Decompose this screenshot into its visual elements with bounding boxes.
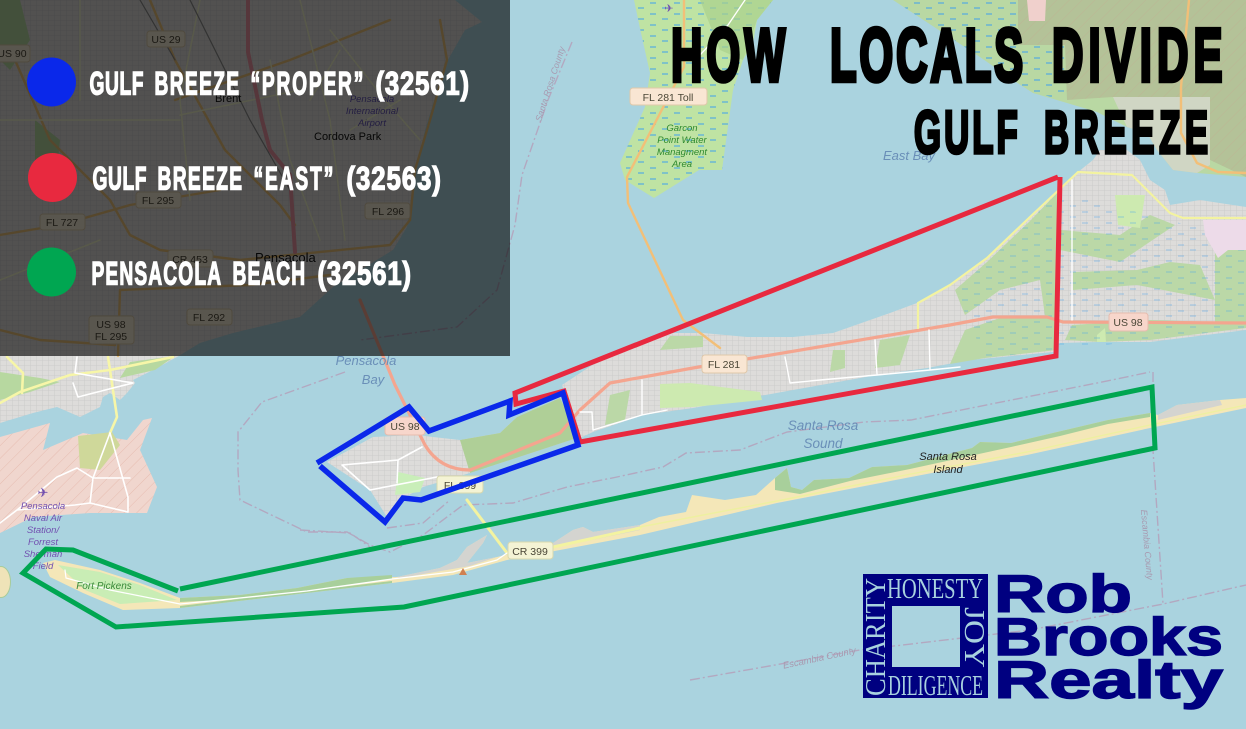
- legend item: proper: “PROPER”: [250, 65, 363, 102]
- legend item: proper: BREEZE: [154, 65, 239, 102]
- label: Pensacola Naval Air Station: Pensacola: [21, 501, 65, 512]
- label: Pensacola Bay: Bay: [362, 372, 386, 387]
- label: Santa Rosa Sound: Sound: [803, 436, 843, 451]
- shield: FL 281: [702, 355, 747, 373]
- label: Pensacola Naval Air Station: Naval Air: [24, 513, 63, 524]
- labels under dark panel: [0, 31, 410, 344]
- white local roads: [580, 180, 1072, 430]
- logo: Rob Brooks Realty: [860, 565, 1224, 710]
- shield: US 98 west: [385, 417, 425, 435]
- city names under panel: Pensacola: [255, 250, 316, 265]
- label: Santa Rosa Island: Island: [933, 464, 964, 476]
- land: north shore and Pensacola: [0, 0, 482, 423]
- wetland dashes east: [955, 192, 1246, 358]
- interstate: [248, 0, 295, 252]
- golf course green: [460, 398, 580, 473]
- label: Santa Rosa Island: Santa Rosa: [919, 451, 977, 463]
- northeast highway: [1181, 0, 1246, 173]
- region outline: Gulf Breeze East (red): [515, 177, 1060, 442]
- lilac site: [1203, 220, 1246, 258]
- label: Escambia County vertical: Escambia County: [1139, 509, 1155, 581]
- white roads gulf breeze: [342, 447, 437, 490]
- shields on map: [385, 88, 1148, 559]
- title: [671, 14, 1223, 97]
- green patches north shore: [0, 0, 175, 400]
- shield text under panel: US 98: [96, 319, 126, 331]
- legend item: proper: GULF: [90, 65, 144, 102]
- legend item: east: “EAST”: [254, 160, 333, 197]
- legend item: beach: [27, 248, 411, 296]
- subtitle: [914, 100, 1208, 166]
- label: Pensacola Bay: Pensacola: [336, 353, 396, 368]
- legend item: proper: [27, 58, 469, 106]
- label: Garcon Point: Managment: [657, 147, 707, 158]
- county and maritime boundaries: [238, 42, 1246, 680]
- roads under panel: [0, 0, 447, 356]
- shield text under panel: FL 295: [95, 331, 127, 343]
- shield: FL 399: FL 399: [444, 480, 476, 492]
- wetland dashes northeast: [893, 0, 1067, 100]
- logo mark: HONESTY: [887, 573, 983, 605]
- shield: US 98 east: US 98: [1113, 317, 1143, 329]
- icon: airplane NAS: ✈: [38, 486, 49, 501]
- shield: US 98 west: US 98: [390, 421, 420, 433]
- legend: [27, 58, 469, 296]
- marker: recreation: [459, 568, 467, 575]
- shield: FL 281: FL 281: [708, 359, 740, 371]
- logo mark: [860, 573, 990, 702]
- Fort Pickens green: [58, 565, 177, 604]
- title: LOCALS: [830, 14, 1023, 97]
- shield: FL 281 Toll: [630, 88, 707, 105]
- land: NAS green area: [78, 432, 120, 470]
- logo wordmark: [994, 565, 1224, 710]
- legend item: east: BREEZE: [158, 160, 242, 197]
- golf lime patches east: [660, 195, 1145, 408]
- region outline: Pensacola Beach (green): [23, 387, 1155, 627]
- white roads NAS: [0, 433, 130, 523]
- airport label under panel: Pensacola: [350, 94, 394, 105]
- land: Gulf Breeze east peninsula: [562, 150, 1246, 438]
- legend item: proper: (32561): [376, 67, 469, 102]
- legend item: beach: BEACH: [232, 255, 305, 292]
- label: Pensacola Naval Air Station: Sherman: [24, 549, 62, 560]
- FL 281 toll: [627, 0, 720, 348]
- CR 399: [467, 500, 507, 553]
- airport label under panel: International: [346, 106, 399, 117]
- Garcon dark green north: [700, 0, 773, 60]
- title: HOW: [671, 14, 785, 97]
- logo mark: JOY: [958, 607, 990, 668]
- green patches east peninsula: [605, 192, 1246, 425]
- label: Garcon Point: Area: [671, 159, 692, 170]
- legend item: east: (32563): [346, 162, 441, 197]
- legend item: east: GULF: [92, 160, 147, 197]
- label: Pensacola Naval Air Station: Station/: [27, 525, 60, 536]
- logo mark: CHARITY: [860, 578, 892, 696]
- subtitle: GULF: [914, 100, 1018, 166]
- airport label under panel: Airport: [357, 118, 386, 129]
- shield text under panel: FL 292: [193, 312, 225, 324]
- label: Santa Rosa Sound: Santa Rosa: [788, 418, 859, 433]
- label: Pensacola Naval Air Station: Field: [33, 561, 54, 572]
- subtitle: BREEZE: [1044, 100, 1208, 166]
- shield: FL 399: [437, 476, 483, 493]
- city names under panel: Cordova Park: [314, 131, 382, 143]
- region outline: Gulf Breeze Proper (blue): [317, 393, 578, 522]
- label: Santa Rosa County: Santa Rosa County: [533, 45, 567, 123]
- icon: airplane north: ✈: [664, 2, 674, 15]
- shield: CR 399: [508, 542, 553, 559]
- label: Pensacola Naval Air Station: Forrest: [28, 537, 58, 548]
- land: Pensacola Naval Air Station: [0, 418, 157, 533]
- label: Garcon Point: Point Water: [657, 135, 708, 146]
- yellow roads lower-left: [0, 357, 173, 403]
- legend item: east: [28, 153, 441, 202]
- shield: CR 399: CR 399: [512, 546, 548, 558]
- land: Garcon Point: [620, 0, 773, 198]
- shield: US 98 east: [1109, 313, 1148, 331]
- label: Garcon Point: Garcon: [666, 123, 698, 134]
- shield text under panel: FL 295: [142, 195, 174, 207]
- land: Santa Rosa Island: [43, 398, 1246, 610]
- label: East Bay: East Bay: [883, 148, 937, 163]
- land: northeast Santa Rosa: [893, 0, 1246, 177]
- wetland dashes Garcon Point: [620, 0, 773, 198]
- Pensacola Beach developed strip: [397, 535, 497, 578]
- label: Escambia County lower: Escambia County: [782, 645, 858, 672]
- town block northeast: [1113, 97, 1210, 173]
- shield group under panel: [0, 31, 410, 344]
- legend item: beach: (32561): [318, 257, 411, 292]
- shield: FL 281 Toll: FL 281 Toll: [643, 92, 693, 104]
- legend item: beach: PENSACOLA: [92, 255, 221, 292]
- Navarre north road: [918, 172, 1246, 328]
- Pensacola Bay bridge and US 98: [360, 300, 1246, 470]
- park green: [395, 472, 425, 495]
- logo wordmark: Rob: [994, 565, 1132, 624]
- island vegetation: [180, 413, 1150, 608]
- shield text under panel: US 29: [151, 34, 181, 46]
- island white road: [180, 553, 507, 604]
- pink site northeast: [1027, 0, 1046, 21]
- land: Gulf Breeze proper: [327, 398, 580, 517]
- legend panel: [0, 0, 510, 356]
- logo wordmark: Brooks: [994, 608, 1223, 667]
- logo wordmark: Realty: [994, 651, 1224, 710]
- land: Perdido Key: [0, 566, 10, 598]
- olive hatch forest: [1018, 0, 1246, 177]
- city names under panel: Brent: [215, 93, 241, 105]
- title: DIVIDE: [1052, 14, 1223, 97]
- label: Fort Pickens: Fort Pickens: [76, 581, 132, 592]
- shield text under panel: FL 296: [372, 206, 404, 218]
- logo mark: DILIGENCE: [888, 670, 983, 702]
- shield text under panel: FL 727: [46, 217, 78, 229]
- shield text under panel: CR 453: [172, 254, 208, 266]
